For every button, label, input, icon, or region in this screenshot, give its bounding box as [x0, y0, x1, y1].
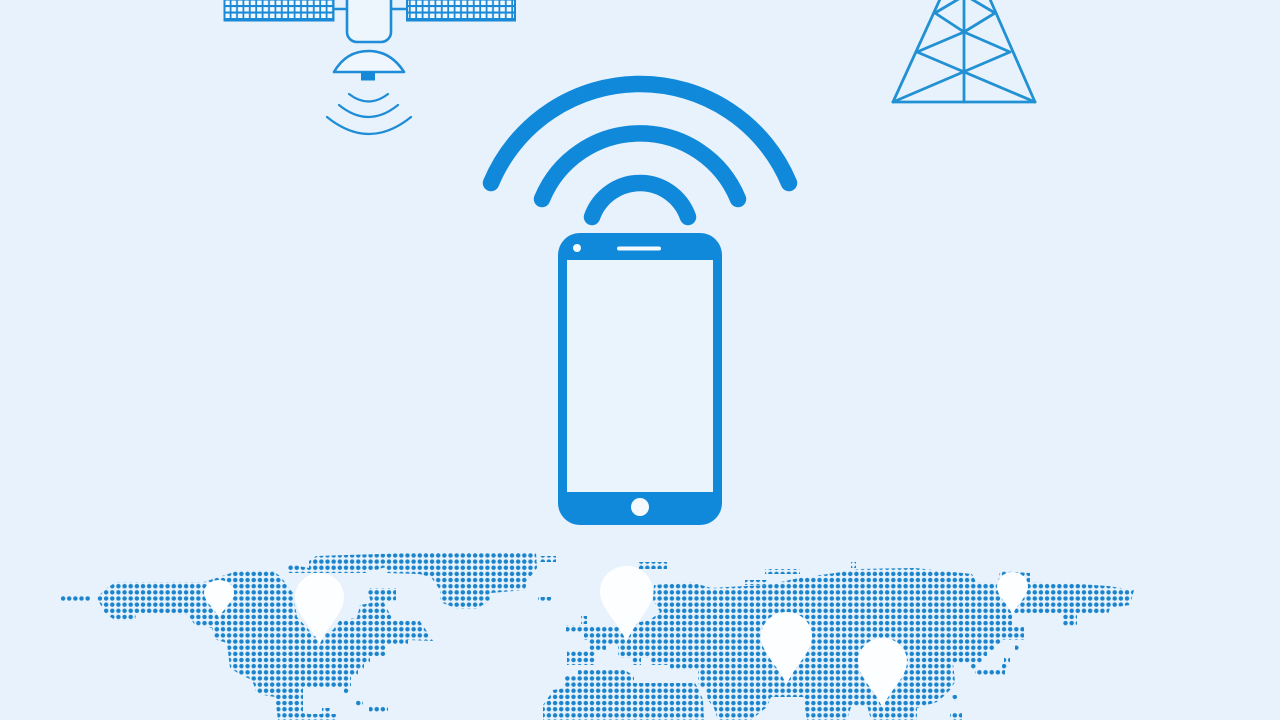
phone screen: [567, 260, 713, 492]
right solar panel: [407, 0, 515, 20]
pin: central asia: [761, 612, 812, 685]
phone body: [558, 233, 722, 525]
world map dots: [50, 540, 1150, 720]
pin: europe: [600, 566, 653, 642]
north america and greenland: [61, 553, 556, 720]
pin: alaska: [204, 580, 234, 618]
pin: south asia: [858, 638, 907, 708]
signal waves: [327, 94, 411, 134]
pin: north america: [295, 573, 344, 645]
dish feed: [361, 72, 375, 80]
icon: smartphone: [558, 233, 722, 525]
pin: far east: [997, 572, 1028, 615]
camera: [573, 244, 581, 252]
location pins: [204, 566, 1028, 708]
home button: [631, 498, 649, 516]
eurasia and africa: [543, 562, 1134, 720]
speaker: [617, 246, 661, 250]
icon: cell tower: [893, 0, 1035, 102]
icon: wifi signal arcs: [491, 84, 789, 217]
satellite body: [347, 0, 391, 42]
satellite dish: [334, 51, 404, 72]
icon: satellite: [224, 0, 515, 134]
left solar panel: [224, 0, 334, 20]
panel connectors: [334, 8, 407, 10]
